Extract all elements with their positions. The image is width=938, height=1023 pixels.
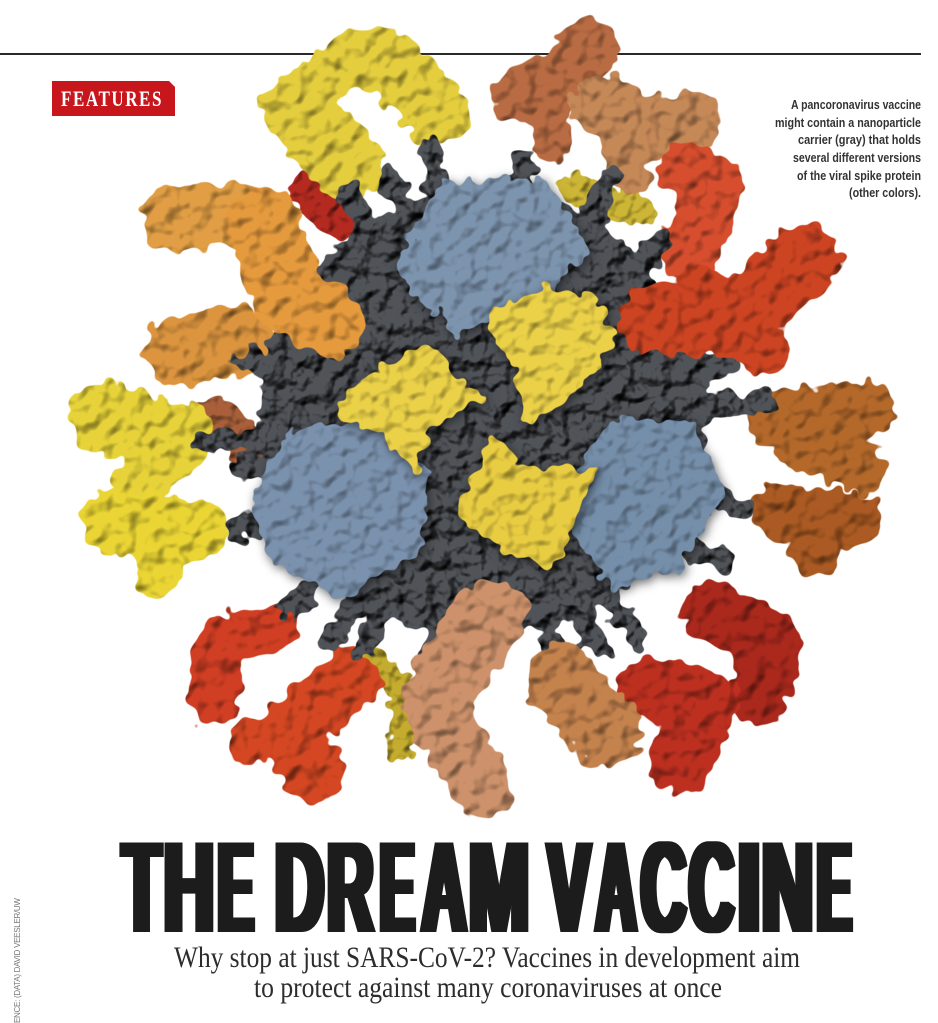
blue-gray patch: left	[250, 420, 430, 600]
spike: bottom tan, in front of core	[430, 615, 490, 790]
spike: left yellow upper	[105, 418, 190, 490]
spike: orange upper left, in front of core	[262, 222, 330, 322]
spike: orange mid left	[180, 340, 240, 350]
spike: orange left top	[175, 215, 238, 218]
spike: brown behind left	[215, 420, 250, 445]
subtitle	[174, 941, 800, 1004]
title: C	[641, 814, 686, 960]
yellow patch: centre bottom	[455, 435, 595, 570]
spike: right brown lower	[780, 512, 855, 555]
yellow patch: centre left	[340, 340, 490, 475]
virus nanoparticle illustration	[105, 48, 865, 790]
blue-gray patch: right	[572, 420, 725, 590]
tag shape	[52, 81, 175, 116]
title: C	[689, 814, 734, 960]
spike: dark red behind top left	[310, 190, 340, 215]
caption: of the viral spike protein	[797, 169, 921, 183]
subtitle: to protect against many coronaviruses at once	[254, 971, 722, 1004]
core sphere	[260, 193, 704, 637]
spike: bottom left red upper	[215, 628, 275, 700]
title: M	[469, 814, 529, 960]
spike: top-right orange red	[690, 172, 715, 250]
title: V	[548, 814, 590, 960]
title: E	[380, 814, 414, 960]
caption: (other colors).	[849, 186, 921, 200]
title: H	[164, 814, 214, 960]
spike: top brown	[520, 48, 590, 145]
blue-gray patch: top	[395, 175, 590, 335]
top rule	[0, 53, 921, 55]
spike: left yellow lower	[115, 522, 195, 575]
spike: top tan	[600, 105, 690, 170]
tag label: FEATURES	[61, 86, 163, 111]
spike: top yellow	[297, 55, 438, 165]
spike: right brown upper	[775, 410, 865, 472]
core spokes	[205, 145, 765, 670]
title: A	[596, 814, 636, 960]
title: I	[737, 814, 761, 960]
spike: small yellow behind top right	[575, 190, 640, 210]
spike: bottom tan right, in front of core	[560, 680, 605, 730]
spike: small yellow behind bottom	[370, 660, 405, 750]
nanoparticle core: spiky gray carrier	[205, 145, 765, 670]
title: D	[275, 814, 324, 960]
spike: bottom left red lower	[250, 680, 350, 772]
title: N	[762, 814, 813, 960]
spike: lower right red, in front of core	[650, 690, 705, 760]
spike: lower right dark red	[710, 610, 770, 695]
text: E	[817, 814, 851, 960]
yellow patch: centre top	[490, 285, 615, 425]
subtitle: Why stop at just SARS-CoV-2? Vaccines in development aim	[174, 941, 800, 974]
title: E	[218, 814, 253, 960]
section tag: Features	[52, 81, 175, 116]
caption: carrier (gray) that holds	[798, 133, 921, 147]
title: R	[327, 814, 373, 960]
spike: right red, in front of core	[655, 260, 805, 350]
caption	[775, 98, 921, 200]
title: T	[123, 814, 160, 960]
photo credit: ENCE: (DATA) DAVID VEESLER/UW	[13, 898, 22, 1023]
title: A	[422, 814, 466, 960]
